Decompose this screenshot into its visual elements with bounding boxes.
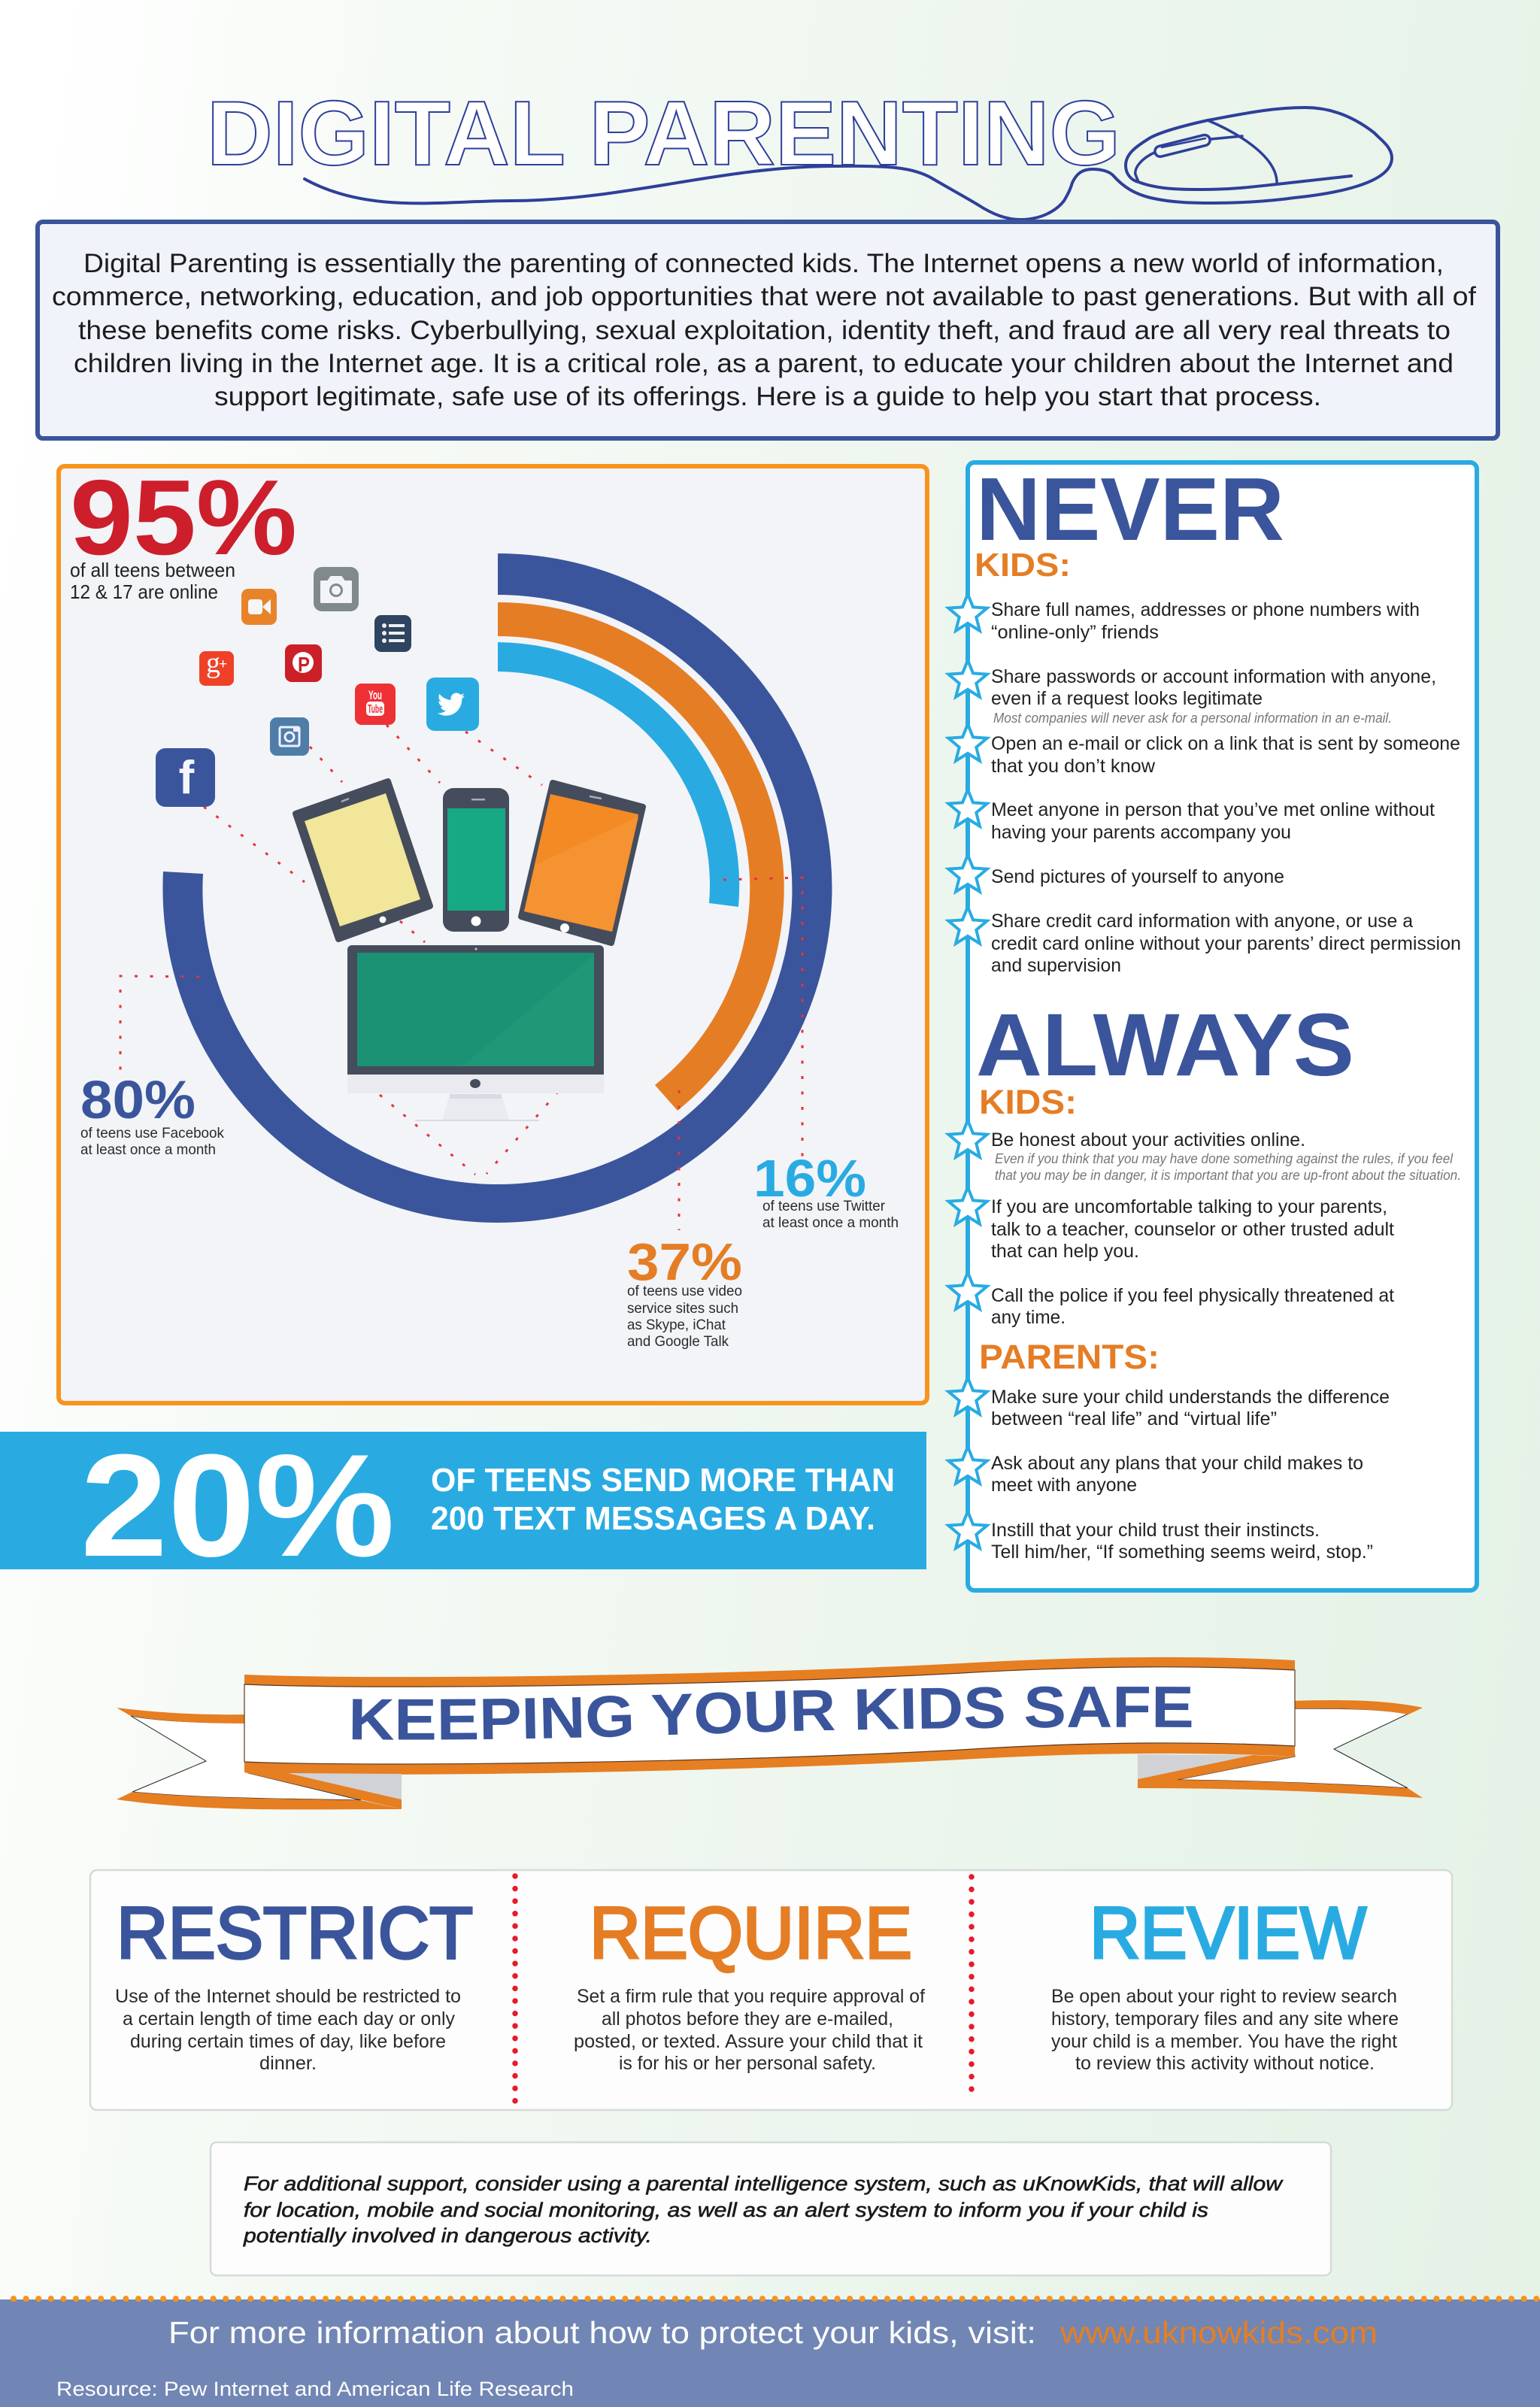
- column: require: Set a firm rule that you require approval of: [577, 1986, 925, 2007]
- icon: facebook: f: [179, 752, 195, 804]
- list: always kids items: that you may be in danger, it is important that you are up-front about the situation.: [995, 1168, 1461, 1183]
- column: review: Be open about your right to review search: [1051, 1986, 1397, 2007]
- left ribbon tail: [117, 1708, 402, 1809]
- icon: google plus: [199, 647, 234, 686]
- intro paragraph: support legitimate, safe use of its offerings. Here is a guide to help you start that process.: [214, 382, 1321, 411]
- panel: never and always lists: [948, 459, 1477, 1590]
- intro paragraph: commerce, networking, education, and job opportunities that were not available to past generations. But with all of: [52, 282, 1476, 311]
- column: require: posted, or texted. Assure your child that it: [574, 2031, 923, 2052]
- intro paragraph: [52, 249, 1476, 411]
- callout: 20 percent text messages: 200 TEXT MESSAGES A DAY.: [431, 1500, 875, 1537]
- stat: 16 percent twitter: 16%: [753, 1149, 866, 1208]
- icon: youtube: You: [368, 688, 382, 702]
- column: require: is for his or her personal safety.: [619, 2053, 876, 2074]
- icon: instagram: [270, 717, 309, 756]
- list: always kids items: Even if you think that you may have done something against the rules, if you feel: [995, 1151, 1454, 1166]
- icon: computer mouse with cable: [305, 108, 1392, 220]
- subheading: kids: KIDS:: [975, 547, 1071, 584]
- column: restrict: RESTRICT: [117, 1892, 473, 1974]
- list: parents items: between “real life” and “virtual life”: [991, 1408, 1277, 1429]
- icons: list stars: [948, 594, 987, 1548]
- heading: never: NEVER: [976, 459, 1284, 559]
- list: never items: “online-only” friends: [991, 622, 1159, 643]
- list: never items: having your parents accompany you: [991, 822, 1291, 843]
- banner: keeping your kids safe: [117, 1657, 1423, 1809]
- footer source credit: Resource: Pew Internet and American Life Research: [56, 2378, 574, 2400]
- icon: google plus: g: [206, 647, 220, 679]
- list: parents items: Ask about any plans that your child makes to: [991, 1453, 1363, 1474]
- icon: facebook: [156, 748, 215, 807]
- callout: 20 percent text messages: 20%: [80, 1424, 395, 1587]
- list: never items: Share credit card information with anyone, or use a: [991, 911, 1413, 932]
- stat: 37 percent video: 37%: [627, 1232, 742, 1291]
- column: restrict: [115, 1892, 473, 2074]
- callout: 20 percent text messages: OF TEENS SEND MORE THAN: [431, 1462, 895, 1499]
- list: always kids items: [991, 1129, 1461, 1328]
- stat: 37 percent video: [627, 1232, 742, 1350]
- list: never items: [991, 599, 1461, 976]
- icon: youtube: Tube: [368, 703, 383, 716]
- panel: additional support note: [211, 2142, 1331, 2275]
- icon: twitter: [426, 678, 479, 731]
- list: never items: Meet anyone in person that you’ve met online without: [991, 799, 1435, 820]
- column: require: REQUIRE: [590, 1892, 912, 1974]
- stat: 37 percent video: of teens use video: [627, 1283, 742, 1299]
- dotted connector lines: [120, 725, 802, 1230]
- column: review: your child is a member. You have the right: [1051, 2031, 1397, 2052]
- stat: 16 percent twitter: [753, 1149, 899, 1231]
- intro paragraph: children living in the Internet age. It is a critical role, as a parent, to educate your children about the Internet and: [74, 349, 1454, 378]
- intro paragraph: these benefits come risks. Cyberbullying, sexual exploitation, identity theft, and fraud are all very real threats to: [78, 316, 1451, 345]
- column: review: REVIEW: [1090, 1892, 1366, 1974]
- icon: youtube: [355, 684, 396, 725]
- icon: left tablet: [296, 781, 430, 939]
- stat: 16 percent twitter: of teens use Twitter: [762, 1198, 885, 1214]
- list: parents items: meet with anyone: [991, 1475, 1137, 1496]
- list: never items: even if a request looks legitimate: [991, 688, 1263, 709]
- ribbon main band: [244, 1657, 1295, 1809]
- list: never items: Share full names, addresses or phone numbers with: [991, 599, 1420, 620]
- intro paragraph: Digital Parenting is essentially the parenting of connected kids. The Internet opens a new world of information,: [83, 249, 1444, 278]
- stat: 37 percent video: as Skype, iChat: [627, 1317, 726, 1333]
- list: always kids items: that can help you.: [991, 1241, 1139, 1262]
- icon: phone: [443, 788, 509, 932]
- icon: pinterest: [285, 644, 322, 682]
- stat: 95 percent: of all teens between: [70, 559, 235, 581]
- column: review: to review this activity without notice.: [1075, 2053, 1375, 2074]
- column: restrict: Use of the Internet should be restricted to: [115, 1986, 461, 2007]
- list: never items: Most companies will never ask for a personal information in an e-mail.: [993, 711, 1392, 726]
- column: restrict: during certain times of day, like before: [130, 2031, 446, 2052]
- footer: [0, 2299, 1540, 2407]
- icon: camera: [314, 567, 359, 611]
- footer call to action: [168, 2315, 1378, 2350]
- icon: pinterest: P: [298, 653, 310, 676]
- chart: concentric usage arcs: [162, 553, 832, 1223]
- subheading: parents: PARENTS:: [979, 1338, 1160, 1376]
- column: review: [1051, 1892, 1399, 2074]
- list: parents items: Make sure your child understands the difference: [991, 1387, 1390, 1408]
- column: review: history, temporary files and any site where: [1051, 2008, 1399, 2030]
- footer call to action: www.uknowkids.com: [1060, 2315, 1378, 2350]
- stat: 37 percent video: service sites such: [627, 1300, 738, 1317]
- stat: 95 percent: 95%: [70, 458, 297, 577]
- column: restrict: a certain length of time each day or only: [123, 2008, 455, 2030]
- heading: always: ALWAYS: [976, 996, 1354, 1095]
- icon: desktop monitor: [347, 945, 604, 1121]
- icon: google plus: +: [219, 656, 227, 672]
- list: never items: that you don’t know: [991, 756, 1156, 777]
- list: never items: credit card online without your parents’ direct permission: [991, 933, 1461, 954]
- panel: additional support note: for location, mobile and social monitoring, as well as an alert system to inform you if your child is: [244, 2199, 1208, 2221]
- column: require: [574, 1892, 925, 2074]
- panel: restrict, require, review: [90, 1870, 1452, 2110]
- column: restrict: dinner.: [259, 2053, 317, 2074]
- stat: 80 percent facebook: [80, 1071, 224, 1158]
- list: never items: Send pictures of yourself to anyone: [991, 866, 1284, 887]
- list: always kids items: Call the police if you feel physically threatened at: [991, 1285, 1394, 1306]
- stat: 80 percent facebook: at least once a month: [80, 1141, 216, 1158]
- list: never items: and supervision: [991, 955, 1121, 976]
- banner heading: KEEPING YOUR KIDS SAFE: [352, 1686, 1191, 1740]
- banner heading: [352, 1686, 1191, 1740]
- subheading: kids: KIDS:: [979, 1083, 1077, 1121]
- panel: teen online statistics: [59, 458, 927, 1403]
- stat: 37 percent video: and Google Talk: [627, 1333, 729, 1350]
- list: parents items: Instill that your child trust their instincts.: [991, 1520, 1320, 1541]
- panel: additional support note: potentially involved in dangerous activity.: [243, 2224, 652, 2247]
- panel: introduction: [38, 222, 1498, 438]
- callout: 20 percent text messages: [0, 1424, 926, 1587]
- stat: 16 percent twitter: at least once a month: [762, 1214, 899, 1231]
- icon: right tablet: [521, 783, 643, 943]
- list: always kids items: any time.: [991, 1307, 1066, 1328]
- right ribbon tail: [1138, 1700, 1423, 1798]
- column: require: all photos before they are e-mailed,: [602, 2008, 893, 2030]
- list: always kids items: talk to a teacher, counselor or other trusted adult: [991, 1219, 1394, 1240]
- stat: 95 percent: 12 & 17 are online: [70, 581, 218, 603]
- list: never items: Open an e-mail or click on a link that is sent by someone: [991, 733, 1460, 754]
- list: always kids items: Be honest about your activities online.: [991, 1129, 1305, 1150]
- icon: video: [241, 589, 277, 625]
- footer call to action: For more information about how to protect your kids, visit:: [168, 2315, 1036, 2350]
- panel: additional support note: For additional support, consider using a parental intelligence system, such as uKnowKids, that will allow: [244, 2172, 1284, 2195]
- list: parents items: [991, 1387, 1390, 1563]
- stat: 80 percent facebook: of teens use Facebook: [80, 1125, 224, 1141]
- list: always kids items: If you are uncomfortable talking to your parents,: [991, 1196, 1387, 1217]
- stat: 80 percent facebook: 80%: [80, 1071, 196, 1130]
- list: parents items: Tell him/her, “If something seems weird, stop.”: [991, 1542, 1373, 1563]
- list: never items: Share passwords or account information with anyone,: [991, 666, 1436, 687]
- title: DIGITAL PARENTING: [207, 82, 1120, 184]
- icon: list: [374, 615, 411, 652]
